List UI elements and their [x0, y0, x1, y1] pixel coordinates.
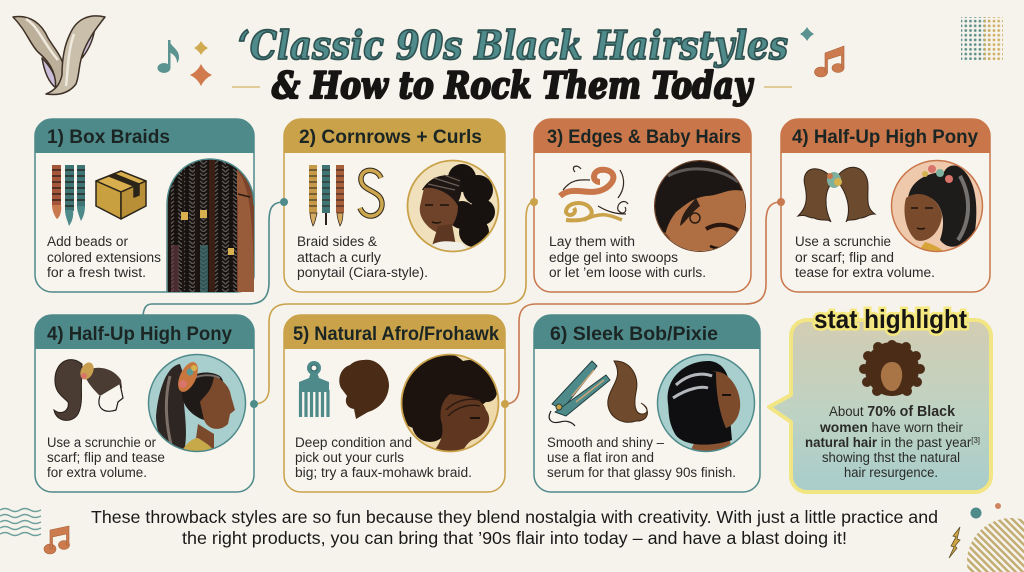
heading: bob: 6) Sleek Bob/Pixie	[550, 324, 718, 345]
header: afro	[284, 315, 505, 349]
icon: footer music notes	[44, 526, 70, 554]
icon: package box	[96, 171, 146, 219]
icon: three cornrows	[309, 165, 344, 226]
icon: afro pick	[299, 361, 329, 417]
heading: stat highlight: stat highlight	[814, 304, 967, 334]
text: teal pony: scarf; flip and tease	[47, 450, 165, 465]
text: half-up pony: tease for extra volume.	[795, 265, 935, 280]
text: statistic: showing thst the natural	[822, 450, 960, 465]
text: statistic: natural hair in the past year	[805, 435, 973, 450]
card 3: edges and baby hairs	[534, 119, 751, 292]
icon: curl	[360, 170, 382, 216]
text: edges: Lay them with	[549, 234, 635, 249]
decorative sparkles	[190, 27, 814, 86]
closing text: These throwback styles are so fun because they blend nostalgia with creativity. With just a little practice and	[91, 507, 938, 527]
icon: afro silhouette	[339, 360, 389, 419]
panel: stat highlight	[769, 304, 991, 492]
text: box braids	[47, 234, 161, 280]
heading: half-up pony: 4) Half-Up High Pony	[792, 127, 978, 148]
title	[238, 23, 788, 107]
header: teal pony	[35, 315, 254, 349]
photo: braids closeup	[166, 158, 256, 293]
text: half-up pony: Use a scrunchie	[795, 234, 891, 249]
decorative dot grid	[961, 17, 1003, 60]
text: teal pony	[47, 435, 165, 480]
text: cornrows: Braid sides &	[297, 234, 377, 249]
icon: ponytail profile	[54, 360, 123, 420]
heading: teal pony: 4) Half-Up High Pony	[47, 324, 232, 345]
header: box braids	[35, 119, 254, 153]
text: bob: use a flat iron and	[547, 450, 654, 465]
text: box braids: colored extensions	[47, 250, 161, 265]
text: bob: serum for that glassy 90s finish.	[547, 465, 736, 480]
card 5: half-up high pony, teal	[35, 315, 254, 492]
portrait: edges closeup	[654, 160, 746, 252]
icon: three braids	[52, 165, 85, 226]
portrait: cornrows with curly ponytail	[408, 161, 498, 248]
closing text: the right products, you can bring that ’90s flair into today – and have a blast doing it!	[182, 528, 847, 548]
card 2: cornrows + curls	[284, 119, 505, 292]
text: half-up pony	[795, 234, 935, 280]
card 1: box braids	[35, 119, 256, 293]
text: bob	[547, 435, 736, 480]
heading: cornrows: 2) Cornrows + Curls	[299, 127, 482, 148]
title accent lines	[232, 86, 792, 88]
connector lines	[143, 202, 781, 404]
text: statistic: women have worn their	[819, 419, 963, 435]
icon: swirls	[560, 166, 628, 220]
icon: lightning bolt	[949, 527, 960, 558]
icon: hair swoop	[608, 361, 647, 422]
heading: afro: 5) Natural Afro/Frohawk	[293, 324, 499, 345]
text: statistic	[805, 404, 980, 480]
heading: edges: 3) Edges & Baby Hairs	[547, 127, 741, 148]
text: afro: big; try a faux-mohawk braid.	[295, 465, 472, 480]
text: statistic: About 70% of Black	[829, 404, 956, 420]
portrait: sleek bob	[656, 354, 756, 454]
text: teal pony: Use a scrunchie or	[47, 435, 156, 450]
card 7: sleek bob/pixie	[534, 315, 760, 492]
icon: flat iron	[549, 361, 610, 426]
header: half-up pony	[781, 119, 990, 153]
text: afro: Deep condition and	[295, 435, 412, 450]
icon: orange music notes	[814, 46, 844, 77]
heading: box braids: 1) Box Braids	[47, 127, 170, 148]
text: bob: Smooth and shiny –	[547, 435, 664, 450]
icon: teal music note	[158, 40, 179, 73]
text: edges	[549, 234, 706, 280]
text: afro: pick out your curls	[295, 450, 404, 465]
header: bob	[534, 315, 760, 349]
title: & How to Rock Them Today	[272, 65, 754, 107]
text: cornrows: ponytail (Ciara-style).	[297, 265, 428, 280]
card 6: natural afro/frohawk	[284, 315, 505, 492]
card 4: half-up high pony	[781, 119, 990, 292]
text: edges: edge gel into swoops	[549, 250, 678, 265]
connector dots	[250, 198, 785, 408]
decorative waves	[0, 508, 41, 536]
decorative dots	[970, 503, 1001, 518]
text: half-up pony: or scarf; flip and	[795, 250, 894, 265]
text: cornrows: attach a curly	[297, 250, 381, 265]
text: statistic: hair resurgence.	[844, 465, 938, 480]
text: afro	[295, 435, 472, 480]
header: cornrows	[284, 119, 505, 153]
text: cornrows	[297, 234, 428, 280]
icon: afro head	[859, 340, 925, 396]
text: edges: or let ’em loose with curls.	[549, 265, 706, 280]
title: ‘Classic 90s Black Hairstyles	[238, 23, 788, 69]
text: statistic: [3]	[971, 436, 980, 445]
text: box braids: Add beads or	[47, 234, 129, 249]
text: teal pony: for extra volume.	[47, 465, 147, 480]
text: box braids: for a fresh twist.	[47, 265, 146, 280]
closing text	[91, 507, 938, 548]
portrait: frohawk	[402, 355, 498, 451]
decorative striped circle	[967, 518, 1024, 572]
portrait: ponytail side profile	[148, 354, 246, 452]
header: edges	[534, 119, 751, 153]
logo: braided V	[13, 16, 105, 95]
portrait: high ponytail	[892, 161, 982, 251]
icon: pigtails with scrunchie	[798, 167, 875, 222]
